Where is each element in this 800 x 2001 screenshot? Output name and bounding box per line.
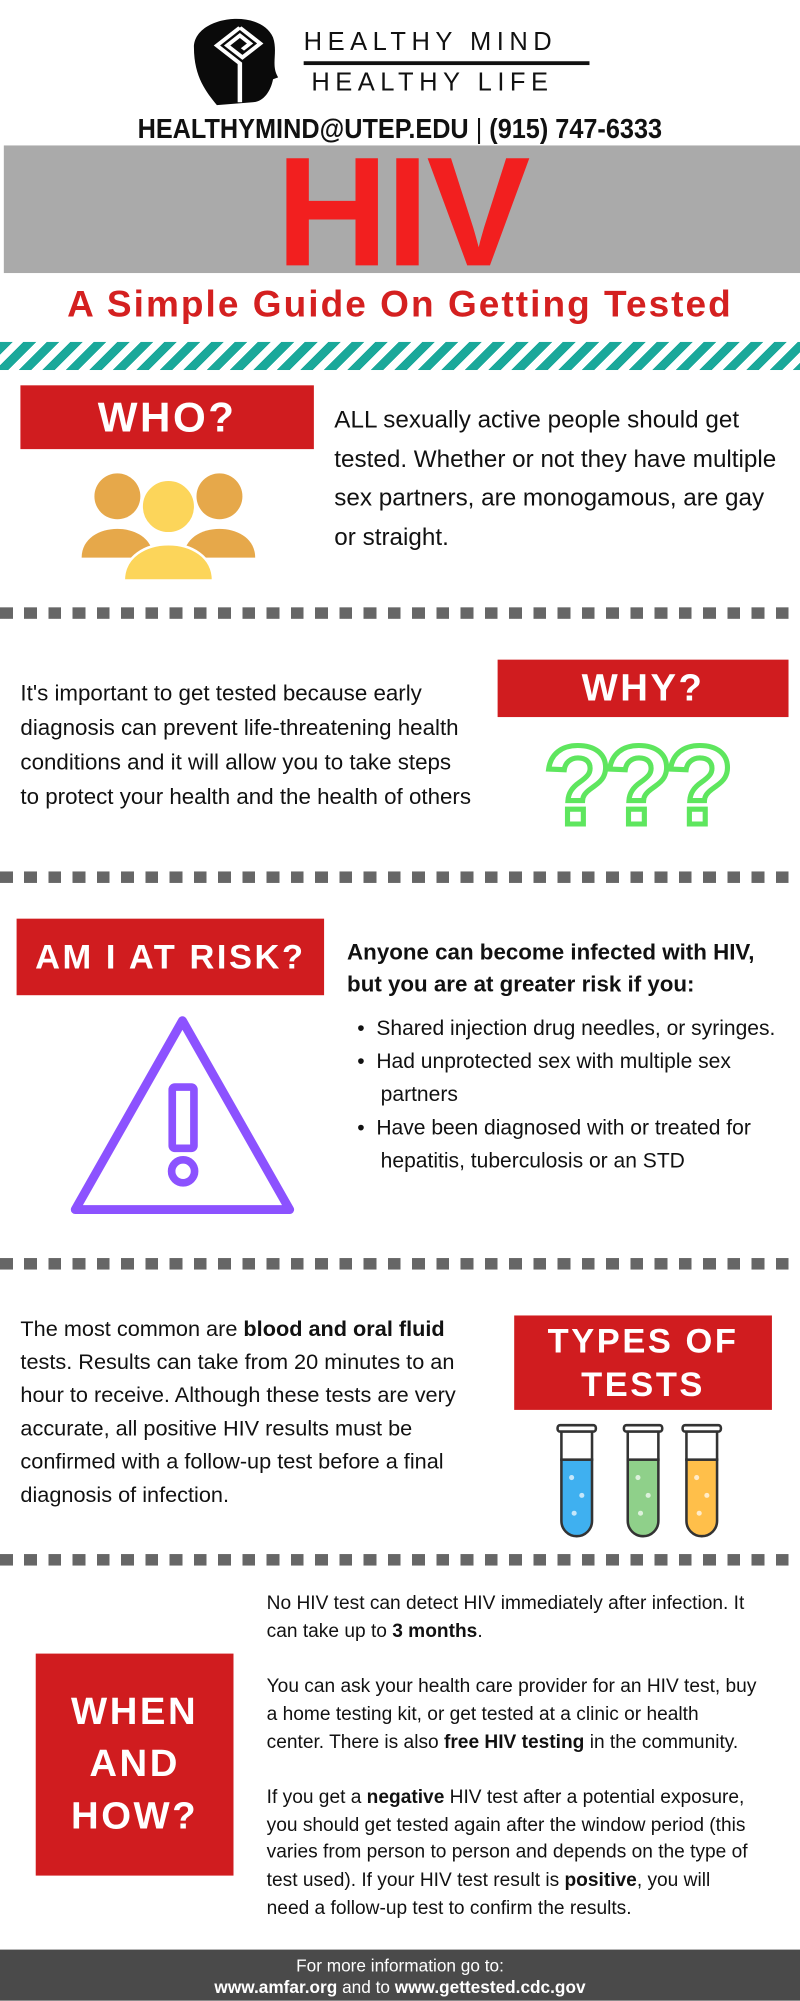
icon: test tubes: [556, 1424, 722, 1538]
heading: WHEN AND HOW: AND: [89, 1743, 180, 1785]
text: who: sex partners, are monogamous, are gay: [334, 485, 764, 512]
text: when and how: center. There is also free HIV testing in the community.: [267, 1731, 738, 1752]
heading: TYPES OF TESTS: TYPES OF: [548, 1322, 738, 1360]
text: when and how: a home testing kit, or get tested at a clinic or health: [267, 1703, 699, 1725]
text: who: ALL sexually active people should get: [334, 407, 739, 434]
text: who: tested. Whether or not they have multiple: [334, 446, 776, 473]
icon: warning triangle: [70, 1016, 294, 1214]
heading: WHEN AND HOW: WHEN: [71, 1691, 198, 1733]
footer: www.amfar.org and to www.gettested.cdc.gov: [214, 1978, 586, 1997]
logo text: HEALTHY MIND: [304, 28, 557, 56]
panel: types: [20, 1315, 772, 1538]
text: when and how: need a follow-up test to confirm the results.: [267, 1897, 632, 1919]
text: types: confirmed with a follow-up test before a final: [20, 1449, 444, 1474]
icon: question marks: ???: [544, 722, 726, 848]
subtitle: A Simple Guide On Getting Tested: [67, 285, 733, 325]
text: risk intro: Anyone can become infected with HIV,: [347, 939, 754, 965]
text: who: [334, 407, 776, 551]
logo text: [304, 28, 590, 97]
text: when and how: you should get tested again after the window period (this: [267, 1814, 745, 1836]
heading: TYPES OF TESTS: [514, 1315, 772, 1410]
panel: who: [20, 385, 776, 580]
banner: HIV: [4, 145, 800, 273]
text: when and how: If you get a negative HIV test after a potential exposure,: [267, 1786, 744, 1808]
text: why: diagnosis can prevent life-threatening health: [20, 715, 459, 740]
panel: when and how: [36, 1592, 756, 1919]
text: types: tests. Results can take from 20 minutes to an: [20, 1350, 454, 1374]
text: why: It's important to get tested because early: [20, 680, 422, 706]
text: when and how: You can ask your health care provider for an HIV test, buy: [267, 1675, 756, 1697]
list: risk factors: • Had unprotected sex with multiple sex: [357, 1050, 731, 1073]
list: risk factors: hepatitis, tuberculosis or an STD: [381, 1150, 685, 1173]
text: when and how: [266, 1592, 756, 1919]
logo text: HEALTHY LIFE: [311, 69, 553, 97]
text: types: diagnosis of infection.: [20, 1483, 229, 1507]
heading: AM I AT RISK: AM I AT RISK?: [35, 938, 306, 976]
list: risk factors: • Shared injection drug needles, or syringes.: [357, 1017, 775, 1040]
list: risk factors: [357, 1017, 775, 1173]
heading: WHO: WHO?: [98, 393, 237, 440]
heading: TYPES OF TESTS: TESTS: [581, 1365, 705, 1404]
heading: WHEN AND HOW: [36, 1654, 233, 1876]
text: types: [20, 1317, 456, 1507]
panel: why: [20, 660, 789, 848]
heading: WHEN AND HOW: HOW?: [71, 1795, 198, 1837]
text: when and how: can take up to 3 months.: [267, 1620, 483, 1642]
footer: For more information go to:: [296, 1956, 504, 1975]
list: risk factors: • Have been diagnosed with or treated for: [357, 1116, 751, 1139]
text: types: hour to receive. Although these tests are very: [20, 1383, 456, 1407]
text: who: or straight.: [334, 524, 449, 551]
text: why: to protect your health and the health of others: [20, 783, 471, 809]
logo: [194, 18, 590, 106]
text: why: conditions and it will allow you to take steps: [20, 749, 451, 774]
text: risk intro: [347, 939, 754, 996]
text: when and how: No HIV test can detect HIV immediately after infection. It: [267, 1592, 744, 1614]
icon: head: [194, 18, 278, 106]
icon: people: [82, 473, 256, 580]
text: why: [20, 680, 471, 809]
contact line: HEALTHYMIND@UTEP.EDU | (915) 747-6333: [138, 112, 662, 144]
text: when and how: test used). If your HIV test result is positive, you will: [267, 1869, 710, 1891]
heading: WHY: [498, 660, 789, 717]
heading: WHO: [20, 385, 314, 449]
heading: AM I AT RISK: [17, 919, 324, 995]
footer: [0, 1950, 800, 2001]
panel: risk: [16, 918, 775, 1214]
text: types: The most common are blood and oral fluid: [20, 1317, 445, 1341]
list: risk factors: partners: [381, 1083, 458, 1106]
text: types: accurate, all positive HIV results must be: [20, 1416, 412, 1441]
text: risk intro: but you are at greater risk if you:: [347, 971, 694, 996]
text: when and how: varies from person to person and depends on the type of: [267, 1842, 748, 1863]
heading: WHY: WHY?: [582, 667, 705, 709]
